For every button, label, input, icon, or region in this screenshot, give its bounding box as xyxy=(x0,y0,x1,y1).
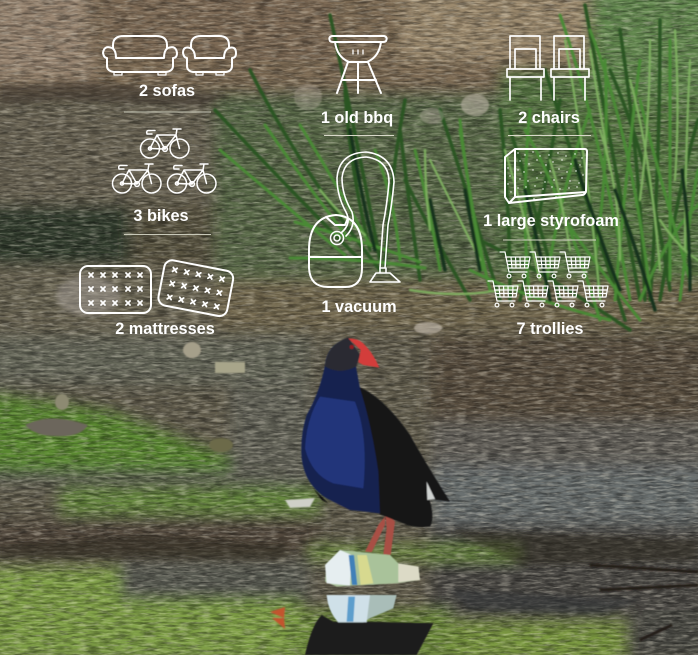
item: 2 chairs xyxy=(507,36,589,127)
dark back and tail xyxy=(353,387,450,527)
item: 1 old bbq xyxy=(321,36,393,127)
label: 7 trollies xyxy=(517,320,583,338)
legs xyxy=(365,512,395,555)
icon: mattress tilted xyxy=(157,259,235,317)
icon: mattress flat xyxy=(80,266,151,313)
icon: vacuum xyxy=(309,152,400,287)
icon: sofas xyxy=(103,36,236,75)
item: 3 bikes xyxy=(112,129,216,225)
icon: bikes xyxy=(112,129,216,193)
item: 2 mattresses xyxy=(80,259,235,338)
label: 2 mattresses xyxy=(115,320,215,338)
label: 1 old bbq xyxy=(321,109,393,127)
icon: trollies xyxy=(488,252,608,307)
icon: styrofoam block xyxy=(505,149,587,203)
item: 7 trollies xyxy=(488,252,608,338)
pūkeko bird standing on plastic bottle xyxy=(301,338,450,587)
item: 2 sofas xyxy=(103,36,236,100)
icon: bbq xyxy=(329,36,387,93)
mud debris xyxy=(25,342,698,640)
label: 1 vacuum xyxy=(321,298,397,316)
icon: chairs xyxy=(507,36,589,100)
item: 1 vacuum xyxy=(309,152,400,316)
label: 3 bikes xyxy=(133,207,189,225)
blue breast xyxy=(301,338,380,513)
pale rocks among reeds xyxy=(294,84,489,334)
bird reflection xyxy=(305,595,433,655)
label: 1 large styrofoam xyxy=(483,212,619,230)
dark head xyxy=(325,338,360,371)
red beak xyxy=(348,338,379,368)
item: 1 large styrofoam xyxy=(483,149,619,230)
label: 2 chairs xyxy=(518,109,580,127)
reeds xyxy=(215,5,698,330)
plastic bottle xyxy=(325,550,420,587)
label: 2 sofas xyxy=(139,82,195,100)
bottle reflection xyxy=(327,595,397,622)
